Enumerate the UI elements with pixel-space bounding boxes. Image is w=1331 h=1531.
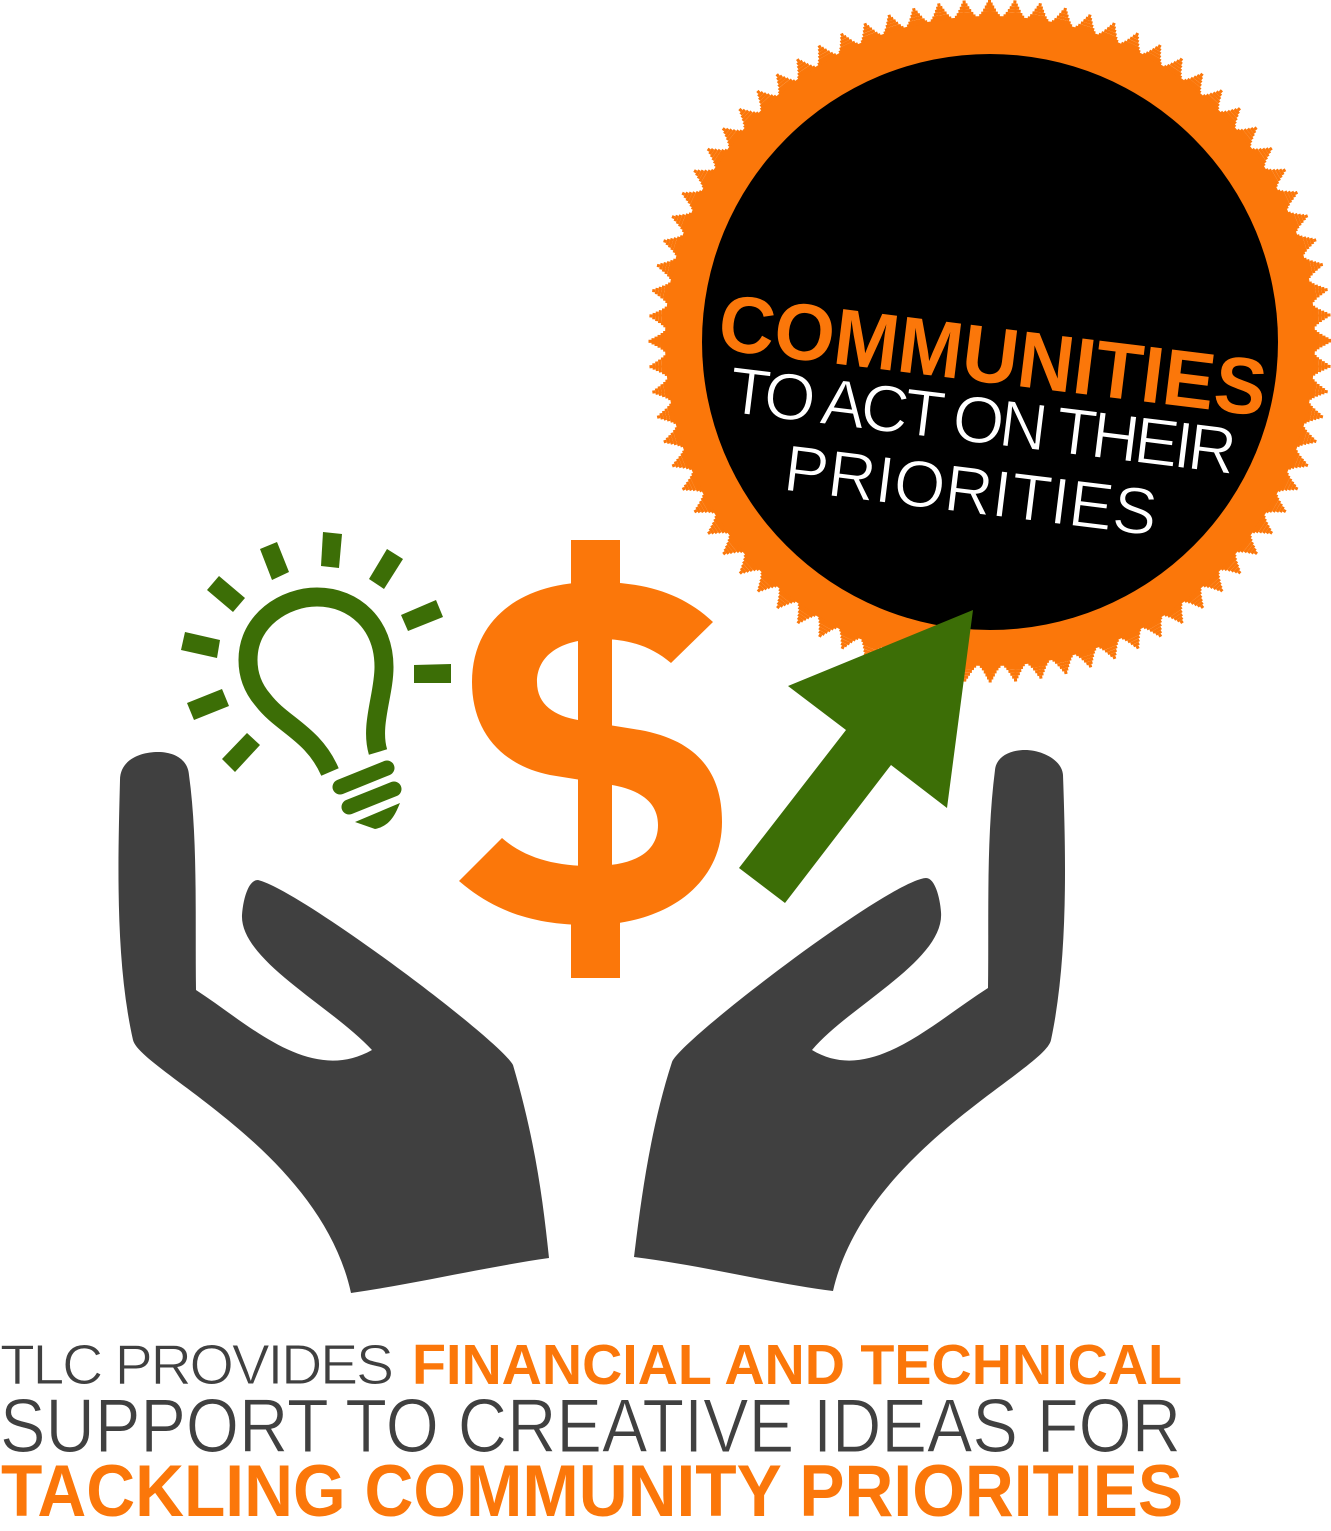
seal heading: communities: COMMUNITIES: [714, 278, 1272, 433]
badge: communities seal: [650, 1, 1330, 681]
icon: dollar sign: [459, 540, 722, 978]
caption text block: [0, 1333, 1183, 1531]
caption line 3: TACKLING COMMUNITY PRIORITIES: [1, 1451, 1183, 1531]
caption line 2: SUPPORT TO CREATIVE IDEAS FOR: [0, 1384, 1181, 1469]
icon: light bulb: [181, 532, 451, 829]
icon: left hand: [118, 752, 549, 1293]
seal: orange serrated edge: [650, 1, 1330, 681]
seal text: to act on their: TO ACT ON THEIR: [725, 352, 1241, 488]
arrow: green pointing up to seal: [739, 610, 973, 903]
caption line 1: [0, 1333, 1182, 1397]
caption line 1: TLC PROVIDES: [0, 1333, 394, 1397]
icon: right hand: [634, 750, 1065, 1291]
seal text: priorities: PRIORITIES: [780, 430, 1162, 550]
caption line 1: FINANCIAL AND TECHNICAL: [412, 1333, 1182, 1397]
seal: black disc: [702, 54, 1278, 630]
